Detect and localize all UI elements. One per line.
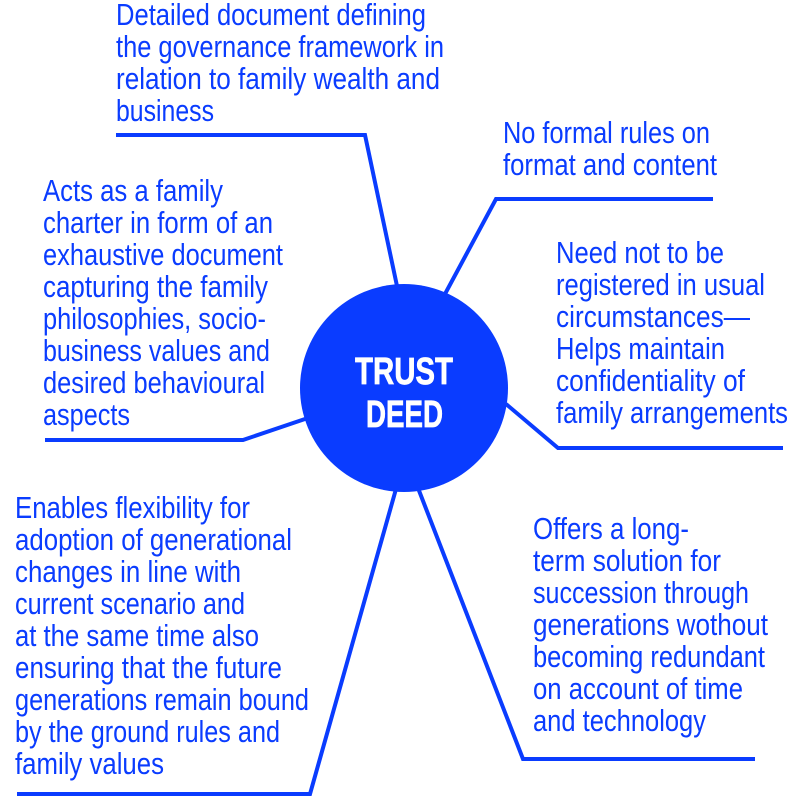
text block: family charter: philosophies, socio-: [43, 301, 266, 336]
text block: governance framework document: business: [116, 93, 214, 128]
text block: governance framework document: the governance framework in: [116, 29, 444, 64]
text block: family charter: Acts as a family: [43, 173, 223, 208]
connector: bottom-left text to circle: [17, 489, 396, 794]
text block: no formal rules: [503, 115, 717, 182]
text block: long-term succession solution: term solution for: [533, 543, 721, 578]
text block: family charter: charter in form of an: [43, 205, 273, 240]
connector: right text to circle: [506, 404, 783, 448]
text block: governance framework document: relation to family wealth and: [116, 61, 440, 96]
text block: flexibility for generational changes: [15, 490, 309, 781]
text block: no formal rules: No formal rules on: [503, 115, 710, 150]
text block: flexibility for generational changes: family values: [15, 746, 164, 781]
text block: registration and confidentiality: confidentiality of: [556, 363, 745, 398]
text block: family charter: aspects: [43, 397, 130, 432]
text block: long-term succession solution: and technology: [533, 703, 706, 738]
text block: registration and confidentiality: Helps maintain: [556, 331, 725, 366]
connector: bottom-right text to circle: [418, 488, 755, 759]
text block: flexibility for generational changes: ensuring that the future: [15, 650, 282, 685]
text block: flexibility for generational changes: by the ground rules and: [15, 714, 280, 749]
text block: long-term succession solution: [533, 511, 768, 738]
central circle: trust deed: DEED: [366, 394, 443, 436]
text block: long-term succession solution: Offers a long-: [533, 511, 689, 546]
connector: top-right text to circle: [445, 199, 713, 294]
central circle: trust deed: TRUST: [355, 351, 453, 393]
text block: family charter: desired behavioural: [43, 365, 265, 400]
text block: registration and confidentiality: [556, 235, 788, 430]
text block: flexibility for generational changes: generations remain bound: [15, 682, 309, 717]
text block: family charter: capturing the family: [43, 269, 268, 304]
text block: long-term succession solution: on account of time: [533, 671, 743, 706]
text block: registration and confidentiality: Need not to be: [556, 235, 724, 270]
text block: long-term succession solution: succession through: [533, 575, 749, 610]
connector: top-left text to circle: [116, 135, 397, 286]
text block: flexibility for generational changes: current scenario and: [15, 586, 245, 621]
text block: family charter: [43, 173, 283, 432]
text block: no formal rules: format and content: [503, 147, 717, 182]
text block: flexibility for generational changes: at the same time also: [15, 618, 259, 653]
central circle: trust deed: [300, 284, 508, 492]
text block: flexibility for generational changes: adoption of generational: [15, 522, 292, 557]
text block: family charter: business values and: [43, 333, 270, 368]
text block: family charter: exhaustive document: [43, 237, 283, 272]
text block: governance framework document: [116, 0, 444, 128]
text block: flexibility for generational changes: changes in line with: [15, 554, 241, 589]
text block: registration and confidentiality: circumstances—: [556, 299, 750, 334]
connector: left text to circle: [45, 419, 305, 440]
text block: flexibility for generational changes: Enables flexibility for: [15, 490, 250, 525]
